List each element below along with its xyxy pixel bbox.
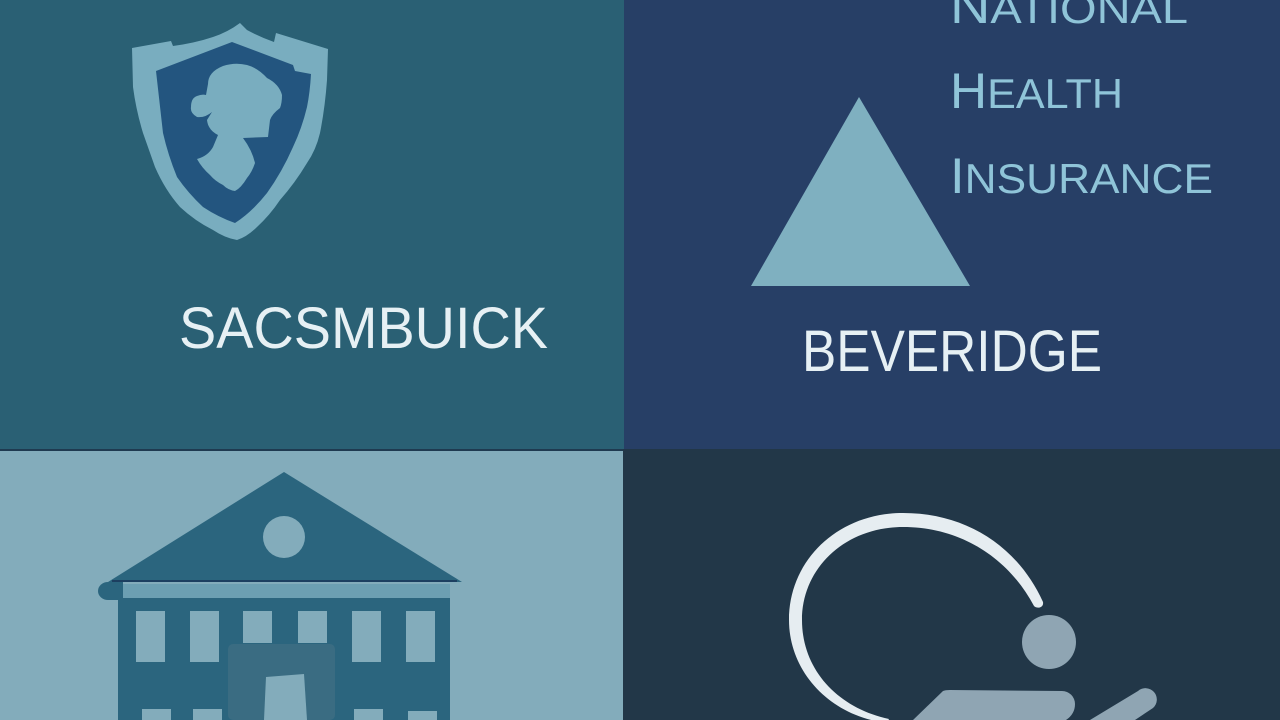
icon: shield with bust	[132, 23, 328, 240]
text block: National Health Insurance: HEALTH	[950, 63, 1123, 119]
icon: building	[98, 472, 462, 720]
icon: triangle	[751, 97, 970, 286]
icon: ring	[789, 513, 1043, 720]
label: SACSMBUICK: SACSMBUICK	[179, 296, 548, 361]
text block: National Health Insurance	[950, 0, 1213, 204]
panel: hospital building	[0, 451, 623, 720]
panel: Beveridge model	[624, 0, 1280, 449]
panel: care	[623, 449, 1280, 720]
panel: Bismarck model	[0, 0, 624, 449]
icon: hand holding person	[913, 615, 1157, 720]
label: BEVERIDGE: BEVERIDGE	[802, 319, 1102, 384]
text block: National Health Insurance: INSURANCE	[950, 148, 1213, 204]
